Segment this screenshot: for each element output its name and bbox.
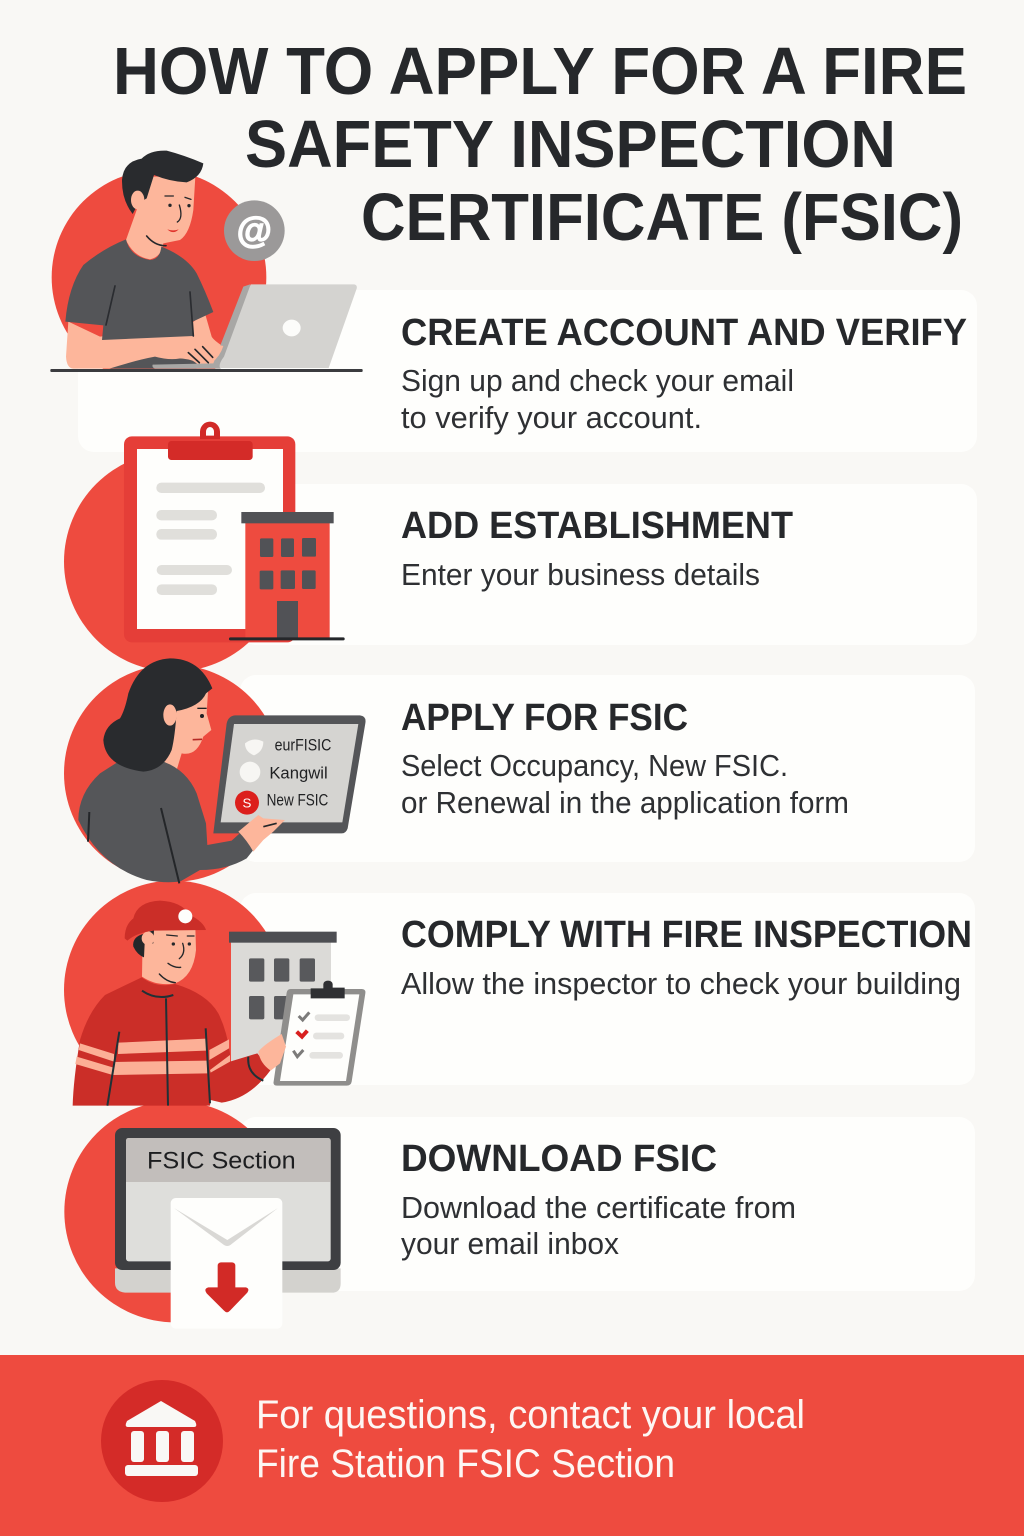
text: step 4: Allow the inspector to check your building — [401, 966, 961, 1001]
icon: FSIC section monitor with email download: FSIC Section — [147, 1147, 296, 1174]
clipboard — [273, 989, 365, 1086]
text: step 1: Sign up and check your email — [401, 363, 794, 398]
desk line — [50, 369, 363, 372]
icon: woman using tablet — [64, 658, 366, 883]
panel: step 4 card — [240, 893, 975, 1085]
face — [168, 204, 172, 207]
text: step 2: ADD ESTABLISHMENT — [401, 505, 793, 547]
hand — [238, 815, 285, 852]
icon: woman using tablet: New FSIC — [267, 791, 328, 810]
arm and neck skin — [66, 313, 223, 369]
uniform — [73, 977, 271, 1106]
panel: step 5 card — [240, 1117, 975, 1291]
building — [231, 942, 331, 1067]
title: SAFETY INSPECTION — [245, 107, 896, 182]
text: step 2 — [401, 505, 793, 592]
text: step 3: Select Occupancy, New FSIC. — [401, 748, 788, 783]
footer text: For questions, contact your local — [256, 1393, 805, 1437]
text: step 3 — [401, 697, 849, 820]
text: step 5: your email inbox — [401, 1226, 619, 1261]
text: step 4 — [401, 914, 972, 1001]
shirt — [65, 239, 213, 340]
text: step 5 — [401, 1138, 796, 1261]
footer banner — [0, 1355, 1024, 1536]
hair — [122, 151, 203, 214]
text: step 3: or Renewal in the application form — [401, 785, 849, 820]
email badge — [224, 200, 285, 261]
helmet — [125, 901, 206, 941]
footer text: Fire Station FSIC Section — [256, 1442, 675, 1486]
text: step 1 — [401, 312, 967, 435]
panel: step 3 card — [240, 675, 975, 862]
title: HOW TO APPLY FOR A FIRE — [113, 34, 967, 109]
text: step 2: Enter your business details — [401, 557, 760, 592]
panel: step 1 card — [78, 290, 977, 452]
icon: clipboard and building — [64, 422, 345, 672]
title — [113, 34, 967, 255]
laptop — [152, 284, 253, 369]
panel: step 2 card — [240, 484, 977, 645]
neck and face — [163, 687, 211, 770]
icon: woman using tablet: Kangwil — [269, 764, 328, 783]
icon: fire inspector with building and checklist — [64, 881, 365, 1106]
text: step 4: COMPLY WITH FIRE INSPECTION — [401, 914, 972, 956]
icon: person at laptop with email badge: @ — [237, 210, 272, 251]
icon: government building — [101, 1380, 223, 1502]
icon: woman using tablet: S — [243, 795, 252, 810]
hand over keyboard — [173, 341, 223, 363]
hair — [103, 658, 212, 772]
sweater — [78, 762, 253, 882]
building — [245, 522, 330, 638]
title: CERTIFICATE (FSIC) — [361, 180, 963, 255]
text: step 3: APPLY FOR FSIC — [401, 697, 688, 739]
text: step 1: to verify your account. — [401, 400, 702, 435]
text: step 5: DOWNLOAD FSIC — [401, 1138, 717, 1180]
text: step 5: Download the certificate from — [401, 1190, 796, 1225]
head — [142, 927, 196, 984]
icon: woman using tablet: eurFISIC — [275, 736, 331, 755]
icon: person at laptop with email badge — [50, 151, 363, 385]
tablet — [213, 715, 366, 833]
hand — [258, 1034, 286, 1071]
footer text — [256, 1393, 805, 1486]
text: step 1: CREATE ACCOUNT AND VERIFY — [401, 312, 967, 354]
icon: FSIC section monitor with email download — [64, 1101, 341, 1329]
